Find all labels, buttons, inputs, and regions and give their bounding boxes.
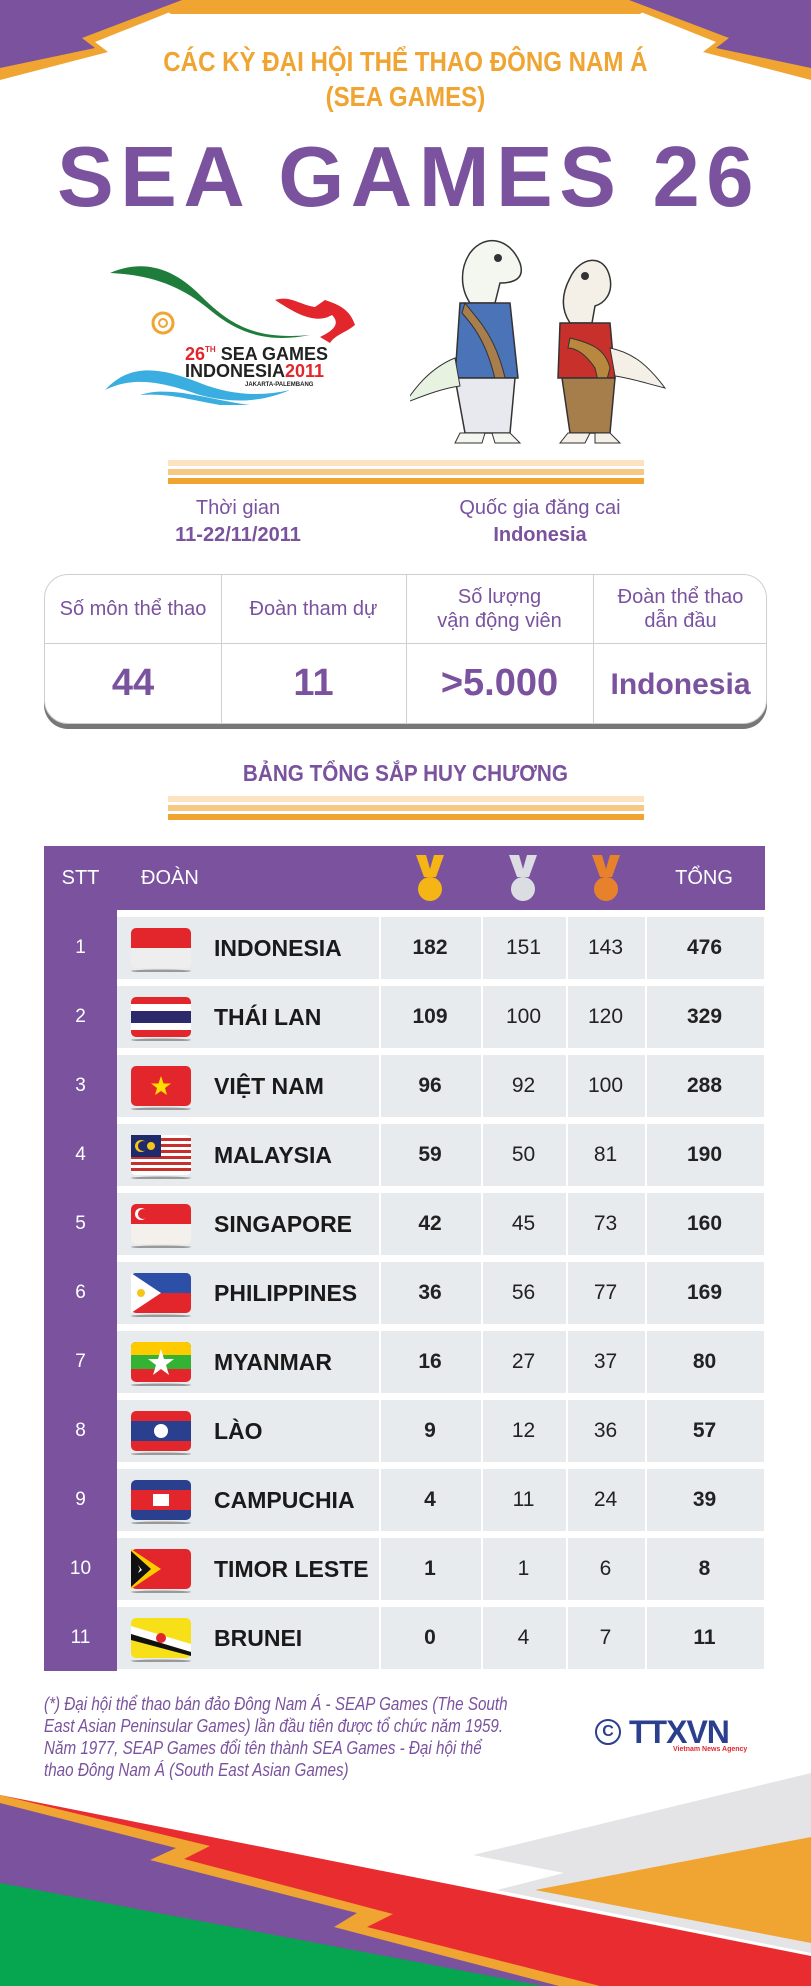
medal table: 59	[418, 1143, 442, 1166]
icon: gold medal	[416, 855, 444, 901]
medal table: 109	[412, 1005, 448, 1028]
footnote: East Asian Peninsular Games) lần đầu tiên được tổ chức năm 1959.	[44, 1716, 503, 1736]
medal table: VIỆT NAM	[214, 1073, 324, 1099]
table header: TỔNG	[675, 867, 733, 889]
medal table: 56	[512, 1281, 535, 1304]
stat: delegations	[250, 598, 377, 704]
row 10: 10	[70, 1558, 91, 1579]
bottom decoration	[0, 1773, 811, 1986]
stat: sports: 44	[112, 662, 154, 704]
row 7: 7	[75, 1351, 86, 1372]
top banner decoration	[0, 0, 811, 80]
row 11: 11	[71, 1627, 90, 1648]
medal table: 50	[512, 1143, 535, 1166]
medal table: 100	[506, 1005, 541, 1028]
medal table: 16	[418, 1350, 442, 1373]
medal table: 42	[418, 1212, 442, 1235]
medal table: INDONESIA	[214, 935, 342, 961]
stat: athletes	[437, 586, 562, 704]
stat: athletes: Số lượng	[458, 586, 541, 608]
medal table: 24	[594, 1488, 617, 1511]
stat: delegations: Đoàn tham dự	[250, 598, 377, 620]
medal table: LÀO	[214, 1418, 263, 1444]
subtitle: CÁC KỲ ĐẠI HỘI THỂ THAO ĐÔNG NAM Á	[163, 46, 648, 77]
icon: silver medal	[509, 855, 537, 901]
medal table: 143	[588, 936, 623, 959]
heading stripes	[168, 796, 644, 820]
stat: leader: Đoàn thể thao	[618, 586, 743, 608]
medal table: 151	[506, 936, 541, 959]
medal table: 9	[424, 1419, 436, 1442]
row 1: 1	[75, 937, 86, 958]
footnote: (*) Đại hội thể thao bán đảo Đông Nam Á - SEAP Games (The South	[44, 1694, 508, 1714]
medal table: 329	[687, 1005, 722, 1028]
mascots	[410, 240, 666, 444]
logo: TTXVN	[595, 1714, 748, 1753]
table header	[62, 866, 733, 889]
stat: leader: dẫn đầu	[644, 610, 717, 632]
medal table: 476	[687, 936, 722, 959]
logo: TTXVN: TTXVN	[629, 1714, 729, 1750]
stats table	[44, 574, 767, 724]
medal table: 6	[600, 1557, 611, 1580]
logo: SEA Games 26: INDONESIA2011	[185, 361, 324, 381]
stat: leader	[610, 586, 751, 701]
subtitle	[163, 46, 648, 112]
info: time	[175, 497, 301, 546]
logo: SEA Games 26: JAKARTA-PALEMBANG	[245, 382, 314, 388]
footnote: thao Đông Nam Á (South East Asian Games)	[44, 1760, 349, 1780]
row 2: 2	[75, 1006, 86, 1027]
stat: sports	[60, 598, 206, 704]
medal table: 100	[588, 1074, 623, 1097]
medal table: 36	[594, 1419, 617, 1442]
medal table: CAMPUCHIA	[214, 1487, 355, 1513]
medal table: 45	[512, 1212, 535, 1235]
medal table: 1	[424, 1557, 436, 1580]
medal table: MALAYSIA	[214, 1142, 332, 1168]
info: host country: Quốc gia đăng cai	[459, 497, 621, 519]
medal table: 37	[594, 1350, 617, 1373]
medal table: 0	[424, 1626, 436, 1649]
logo: TTXVN: Vietnam News Agency	[673, 1746, 747, 1753]
stat: athletes: >5.000	[441, 662, 558, 704]
info: host country: Indonesia	[493, 524, 587, 546]
title: SEA GAMES 26	[57, 130, 760, 225]
logo: SEA Games 26	[105, 266, 355, 405]
info: time: Thời gian	[196, 497, 280, 519]
medal table: 182	[412, 936, 448, 959]
medal table: 288	[687, 1074, 722, 1097]
medal table: 36	[418, 1281, 442, 1304]
stat: athletes: vận động viên	[437, 610, 562, 632]
icon: bronze medal	[592, 855, 620, 901]
medal table: 96	[418, 1074, 442, 1097]
medal table: 11	[513, 1488, 534, 1511]
medal table: 4	[424, 1488, 436, 1511]
stat: leader: Indonesia	[610, 668, 751, 701]
info: host country	[459, 497, 621, 546]
medal table: 39	[693, 1488, 716, 1511]
medal table: 12	[512, 1419, 535, 1442]
stat: delegations: 11	[293, 662, 334, 704]
row 9: 9	[75, 1489, 86, 1510]
decorative stripes top	[168, 460, 644, 484]
footnote: Năm 1977, SEAP Games đổi tên thành SEA Games - Đại hội thể	[44, 1738, 482, 1758]
info: time: 11-22/11/2011	[175, 524, 301, 546]
row 6: 6	[75, 1282, 86, 1303]
medal table: 80	[693, 1350, 716, 1373]
row 8: 8	[75, 1420, 86, 1441]
row 5: 5	[75, 1213, 86, 1234]
table header: STT	[62, 867, 99, 889]
medal table: 7	[600, 1626, 611, 1649]
medal table heading: BẢNG TỔNG SẮP HUY CHƯƠNG	[243, 760, 568, 786]
logo: SEA Games 26: 26	[185, 344, 205, 364]
footnote	[44, 1694, 508, 1780]
medal table: 92	[512, 1074, 535, 1097]
logo: TTXVN: C	[602, 1723, 614, 1740]
medal table: 81	[594, 1143, 617, 1166]
medal table: 160	[687, 1212, 722, 1235]
medal table: 190	[687, 1143, 722, 1166]
medal table: 120	[588, 1005, 623, 1028]
medal table: 8	[699, 1557, 710, 1580]
medal table: 4	[518, 1626, 529, 1649]
row 4: 4	[75, 1144, 86, 1165]
medal table: SINGAPORE	[214, 1211, 352, 1237]
medal table: 1	[518, 1557, 529, 1580]
medal table: 73	[594, 1212, 617, 1235]
medal table: TIMOR LESTE	[214, 1556, 369, 1582]
medal table: PHILIPPINES	[214, 1280, 357, 1306]
medal table: 77	[594, 1281, 617, 1304]
table header: ĐOÀN	[141, 867, 199, 889]
medal table: 57	[693, 1419, 716, 1442]
medal table: 169	[687, 1281, 722, 1304]
medal table: THÁI LAN	[214, 1004, 321, 1030]
medal table: BRUNEI	[214, 1625, 302, 1651]
logo: SEA Games 26: TH	[205, 345, 216, 354]
medal table: 27	[512, 1350, 535, 1373]
row 3: 3	[75, 1075, 86, 1096]
medal table: 11	[693, 1626, 716, 1649]
logo: SEA Games 26: SEA GAMES	[216, 344, 328, 364]
subtitle: (SEA GAMES)	[326, 81, 485, 112]
medal table: MYANMAR	[214, 1349, 332, 1375]
stat: sports: Số môn thể thao	[60, 598, 206, 620]
